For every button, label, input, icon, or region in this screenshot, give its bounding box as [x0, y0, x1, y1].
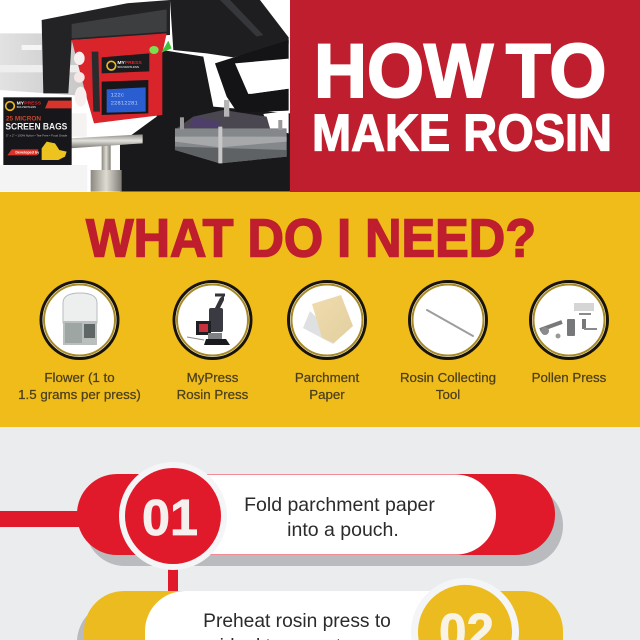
connector: left line into step 1: [0, 511, 80, 527]
photo: rosin press with screen bags: 22812281: [111, 99, 138, 106]
step text: into a pouch.: [287, 519, 399, 541]
photo: rosin press with screen bags: 25 MICRON: [6, 117, 41, 123]
icon: paper sheets: [303, 295, 353, 344]
item label: Flower (1 to: [44, 370, 115, 385]
pill: [84, 591, 563, 640]
photo: rosin press with screen bags: 122c: [111, 92, 124, 99]
photo: rosin press with screen bags: 5" x 2" • 100% Nylon • Tea-Free • Food Grade: [6, 134, 68, 138]
panel: what do I need: [0, 192, 640, 427]
number badge: [119, 462, 227, 570]
icon: tool: [427, 310, 473, 336]
photo: rosin press with screen bags: Developed by: [15, 151, 40, 155]
item label: Rosin Collecting: [400, 370, 496, 385]
item label: Pollen Press: [532, 370, 607, 385]
step text: Preheat rosin press to: [203, 611, 391, 632]
connector: step 1 to step 2: [168, 555, 178, 593]
photo: rosin press with screen bags: SCREEN BAGS: [5, 121, 67, 131]
number badge: 01: [142, 489, 198, 546]
item label: Rosin Press: [177, 387, 249, 402]
step 1: [77, 462, 563, 570]
title line 1: HOW TO: [314, 28, 606, 113]
icon: scale: [63, 293, 97, 345]
photo: rosin press with screen bags: MYPRESS: [117, 60, 142, 66]
step 2: [77, 578, 563, 640]
pill: [77, 474, 555, 555]
item: flower scale: [18, 282, 141, 402]
icon: press: [187, 295, 230, 345]
item label: Tool: [436, 387, 460, 402]
item label: Paper: [309, 387, 345, 402]
item: collecting tool: [400, 282, 496, 402]
step text: Fold parchment paper: [244, 494, 435, 516]
item label: Parchment: [295, 370, 359, 385]
number badge: [411, 578, 519, 640]
item: parchment paper: [288, 282, 366, 402]
item label: MyPress: [187, 370, 239, 385]
photo: rosin press with screen bags: [0, 0, 290, 192]
item: rosin press: [174, 282, 251, 402]
text panel: [145, 591, 490, 640]
icon: pollen press parts: [540, 303, 597, 338]
photo: rosin press with screen bags: MYPRESS: [17, 100, 42, 106]
pill shadow: [85, 485, 563, 566]
pill shadow: [77, 602, 300, 640]
photo: rosin press with screen bags: SOLVENTLESS: [17, 105, 36, 109]
title line 2: MAKE ROSIN: [312, 104, 612, 162]
section heading: WHAT DO I NEED?: [86, 208, 536, 268]
photo: rosin press with screen bags: SOLVENTLESS: [117, 65, 139, 69]
item: pollen press: [530, 282, 608, 385]
text panel: [150, 474, 496, 554]
header panel: [290, 0, 640, 192]
item label: 1.5 grams per press): [18, 387, 141, 402]
